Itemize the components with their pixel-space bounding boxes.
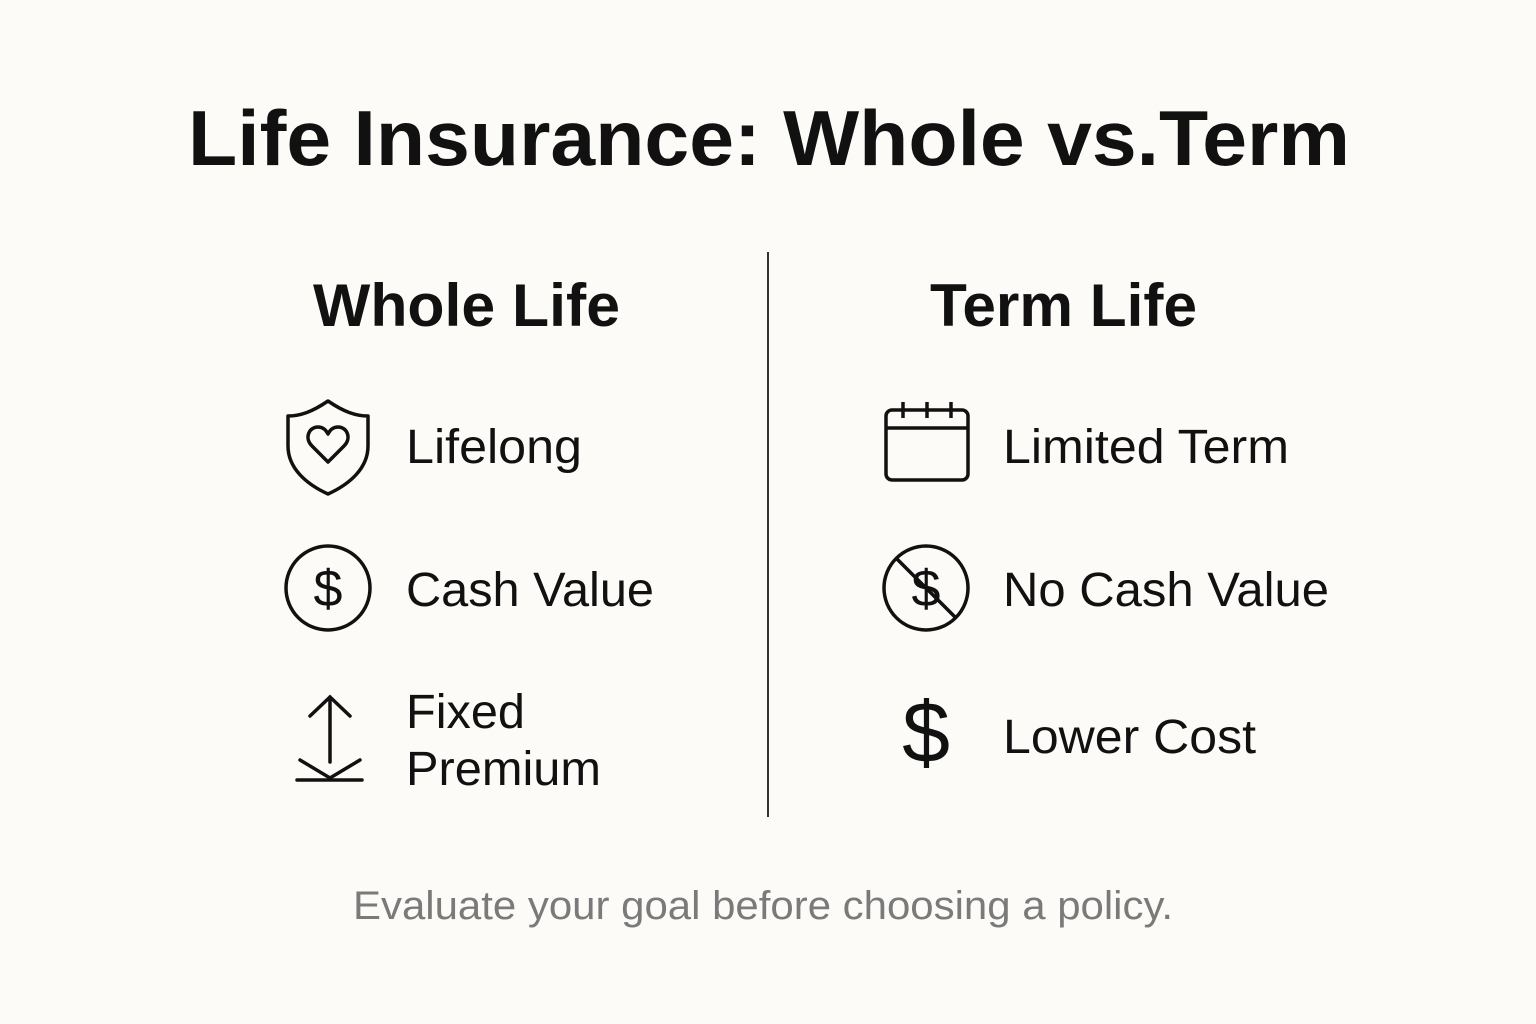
- text: fixed premium: Fixed: [406, 686, 525, 739]
- icon: calendar: [886, 402, 968, 480]
- title: Life Insurance: Whole vs.Term: [188, 94, 1350, 182]
- text: fixed premium: [406, 686, 601, 796]
- icon: dollar circle: [286, 546, 370, 630]
- text: lifelong: Lifelong: [406, 421, 582, 474]
- icon: no dollar: [884, 546, 968, 630]
- icon: no dollar: $: [912, 560, 941, 618]
- icon: dollar: $: [902, 685, 950, 781]
- footer note: Evaluate your goal before choosing a policy.: [353, 884, 1173, 928]
- text: limited term: Limited Term: [1003, 421, 1289, 474]
- icon: arrow up tray: [297, 697, 362, 780]
- text: fixed premium: Premium: [406, 743, 601, 796]
- heading: whole life: Whole Life: [313, 272, 620, 339]
- icon: dollar circle: $: [314, 560, 343, 618]
- icon: shield heart: [288, 401, 368, 494]
- text: no cash value: No Cash Value: [1003, 564, 1329, 617]
- text: cash value: Cash Value: [406, 564, 654, 617]
- heading: term life: Term Life: [930, 272, 1197, 339]
- text: lower cost: Lower Cost: [1003, 711, 1256, 764]
